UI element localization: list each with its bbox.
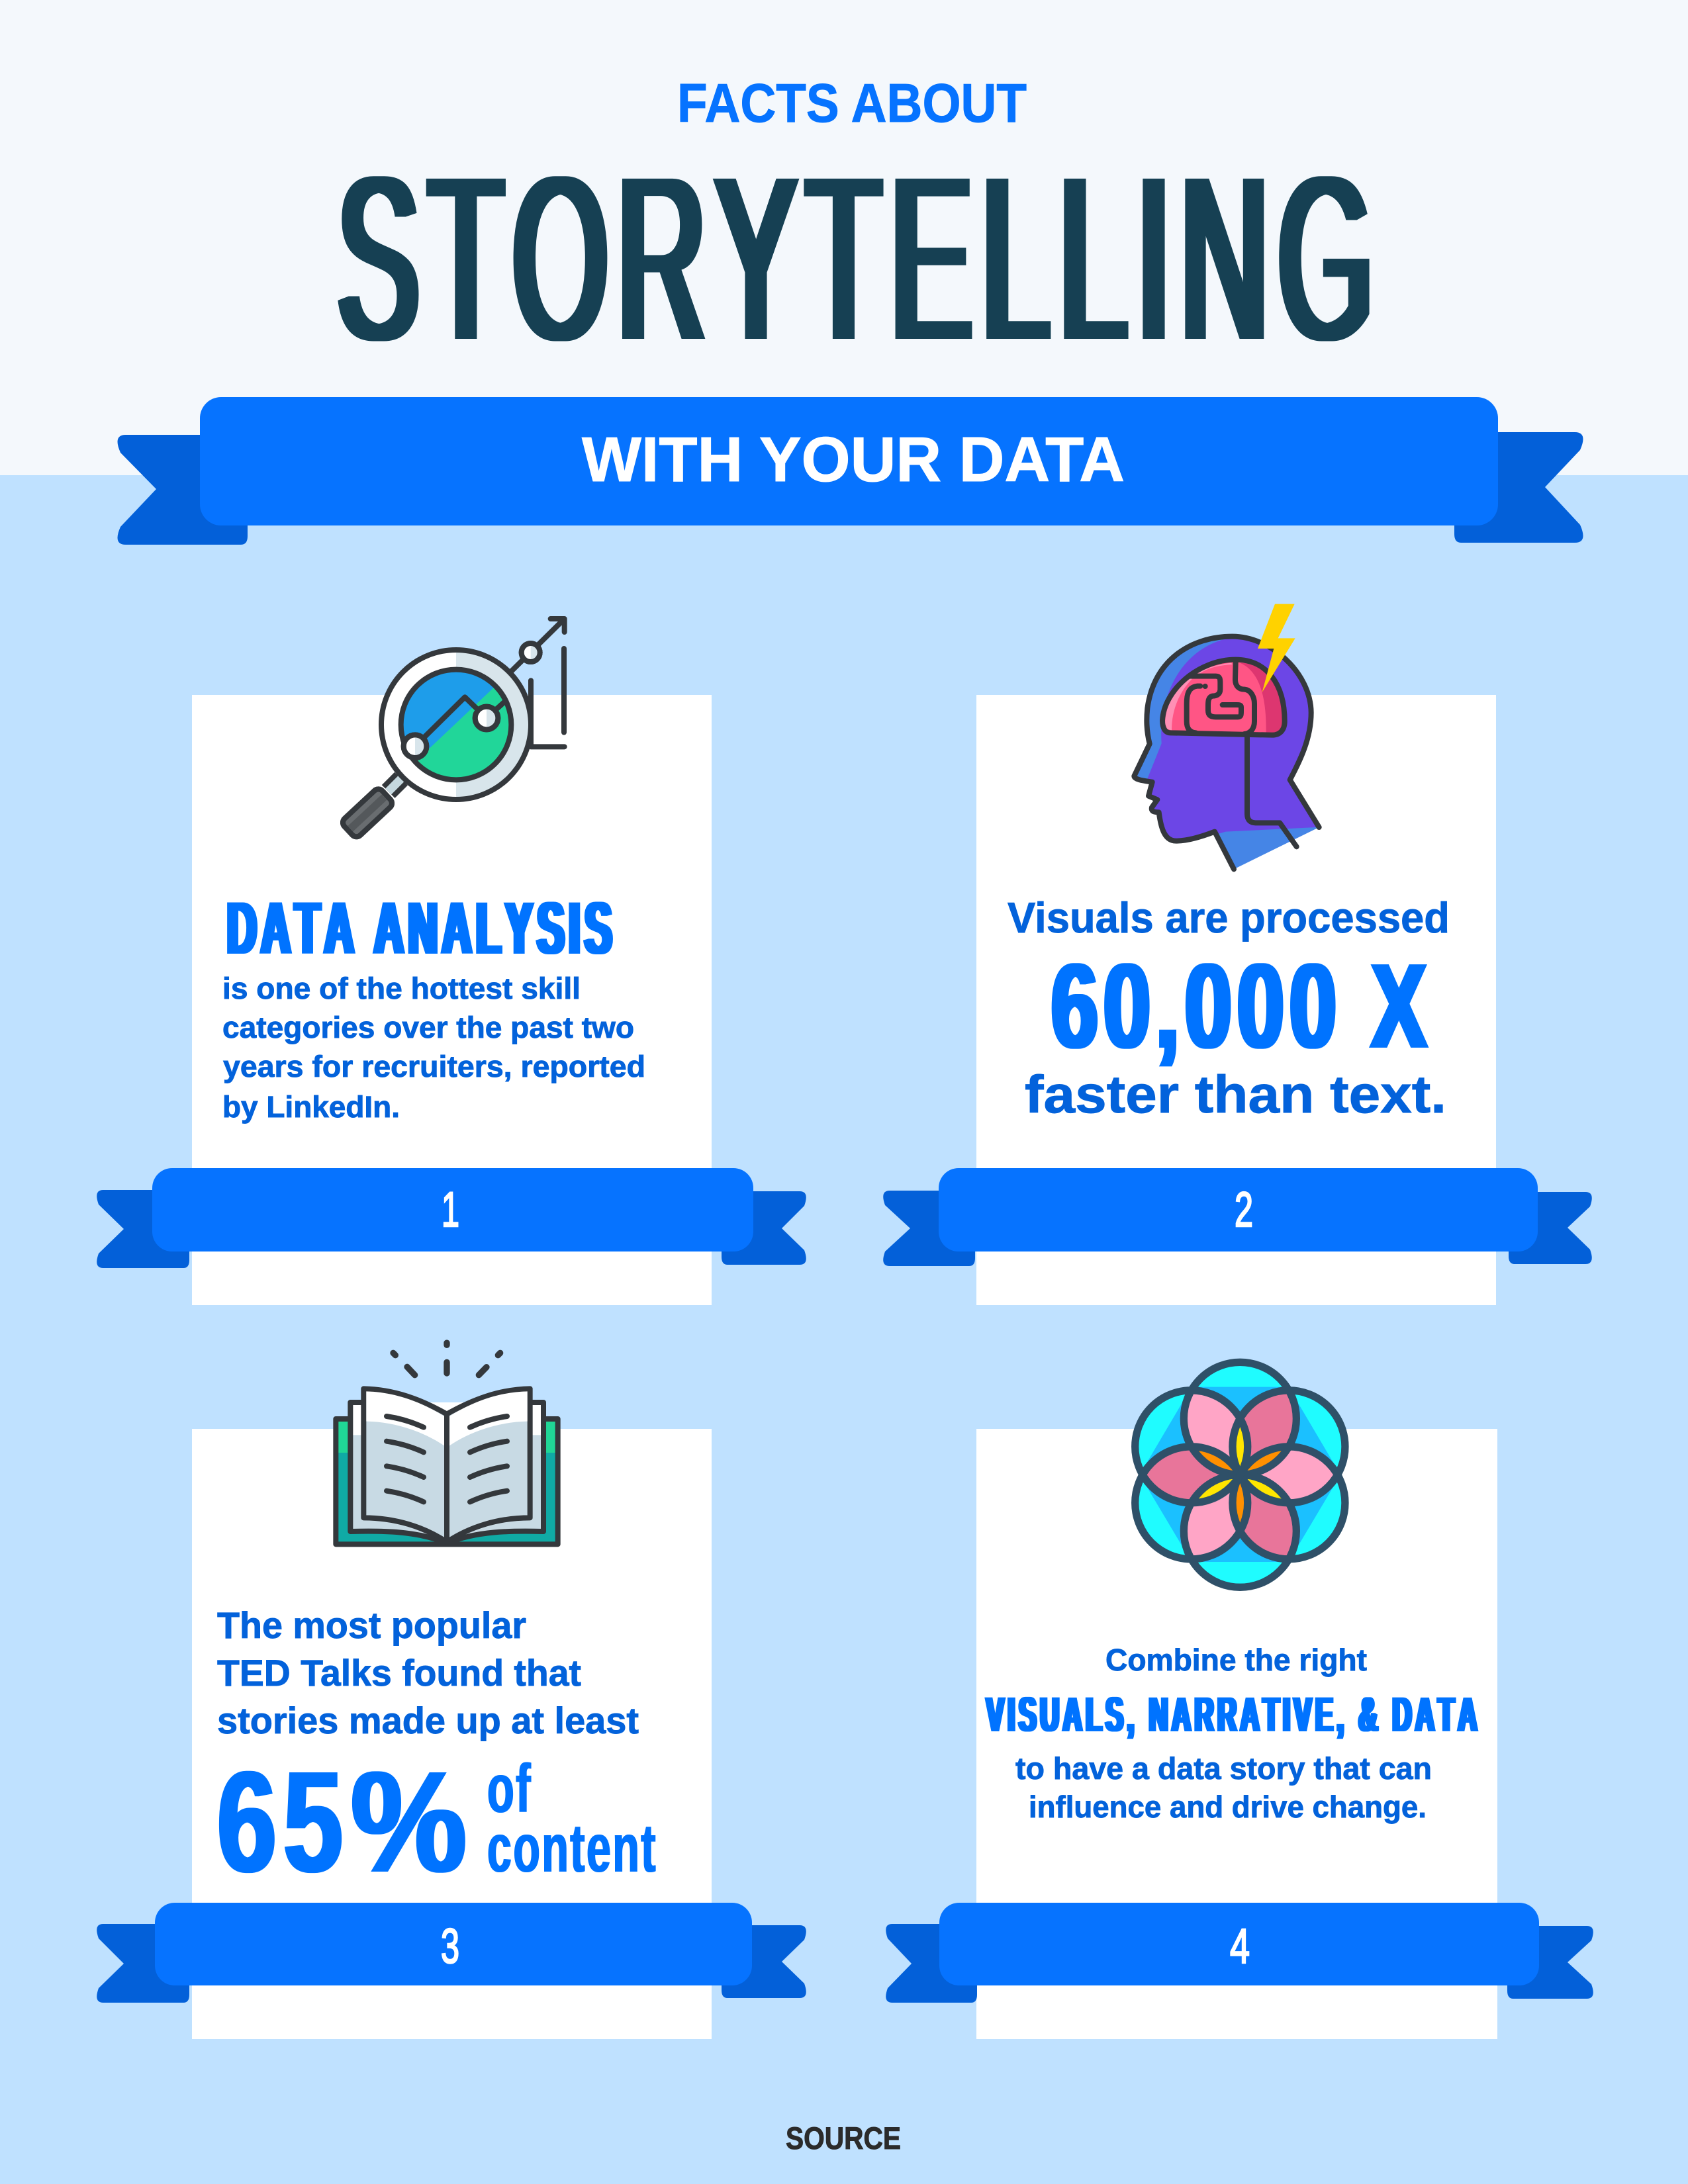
- stat: 65%: 65: [217, 1742, 350, 1903]
- background: light top band: [0, 0, 1688, 475]
- banner: with your data: WITH YOUR DATA: [582, 424, 1125, 495]
- ribbon: number 1: 1: [442, 1182, 459, 1237]
- panel: fact 2 visuals: [883, 604, 1592, 1305]
- body text: fact 1: by LinkedIn.: [222, 1090, 400, 1124]
- body text: fact 1: categories over the past two: [222, 1011, 634, 1044]
- text: combine the right: Combine the right: [1105, 1643, 1367, 1677]
- text: visuals are processed: Visuals are processed: [1008, 893, 1450, 942]
- icon: seed of life flower: [1135, 1362, 1345, 1587]
- card 3 background: [192, 1429, 712, 2039]
- icon: open book: [336, 1343, 558, 1544]
- label: of content: of: [487, 1751, 532, 1827]
- card 1 background: [192, 695, 712, 1305]
- icon: magnifying glass over chart: [340, 619, 565, 839]
- body text: fact 1: is one of the hottest skill: [222, 972, 581, 1005]
- ribbon: number 2: 2: [1235, 1182, 1253, 1237]
- card 4 background: [976, 1429, 1497, 2039]
- body text: fact 4: [1015, 1751, 1432, 1824]
- body text: fact 1: [222, 972, 645, 1124]
- panel: fact 1 data analysis: [97, 619, 806, 1305]
- stat: 60,000 X: 60,000 X: [1051, 938, 1432, 1073]
- ribbon: number 2: [883, 1168, 1592, 1266]
- body text: fact 3: TED Talks found that: [217, 1652, 581, 1694]
- panel: fact 4 combine: [886, 1362, 1593, 2039]
- stat: 65%: %: [351, 1742, 467, 1903]
- body text: fact 3: stories made up at least: [217, 1700, 639, 1741]
- background: blue lower area: [0, 475, 1688, 2184]
- panel: fact 3 TED talks: [97, 1343, 806, 2039]
- body text: fact 4: to have a data story that can: [1015, 1751, 1432, 1786]
- label: of content: [487, 1751, 657, 1887]
- icon: head with brain and lightning: [1134, 604, 1319, 869]
- banner: with your data: [118, 397, 1583, 545]
- heading: data analysis: DATA ANALYSIS: [227, 887, 616, 970]
- body text: fact 3: The most popular: [217, 1604, 526, 1646]
- label: of content: content: [487, 1810, 657, 1887]
- ribbon: number 1: [97, 1168, 806, 1268]
- card 2 background: [976, 695, 1496, 1305]
- body text: fact 4: influence and drive change.: [1029, 1790, 1427, 1824]
- heading: facts about: FACTS ABOUT: [677, 72, 1027, 134]
- body text: fact 1: years for recruiters, reported: [223, 1050, 645, 1083]
- body text: fact 3: [217, 1604, 639, 1741]
- ribbon: number 3: [97, 1903, 806, 2003]
- ribbon: number 4: 4: [1230, 1919, 1250, 1974]
- footer: source: SOURCE: [786, 2120, 901, 2156]
- text: faster than text: faster than text.: [1025, 1065, 1446, 1124]
- ribbon: number 4: [886, 1903, 1593, 2003]
- ribbon: number 3: 3: [441, 1919, 459, 1974]
